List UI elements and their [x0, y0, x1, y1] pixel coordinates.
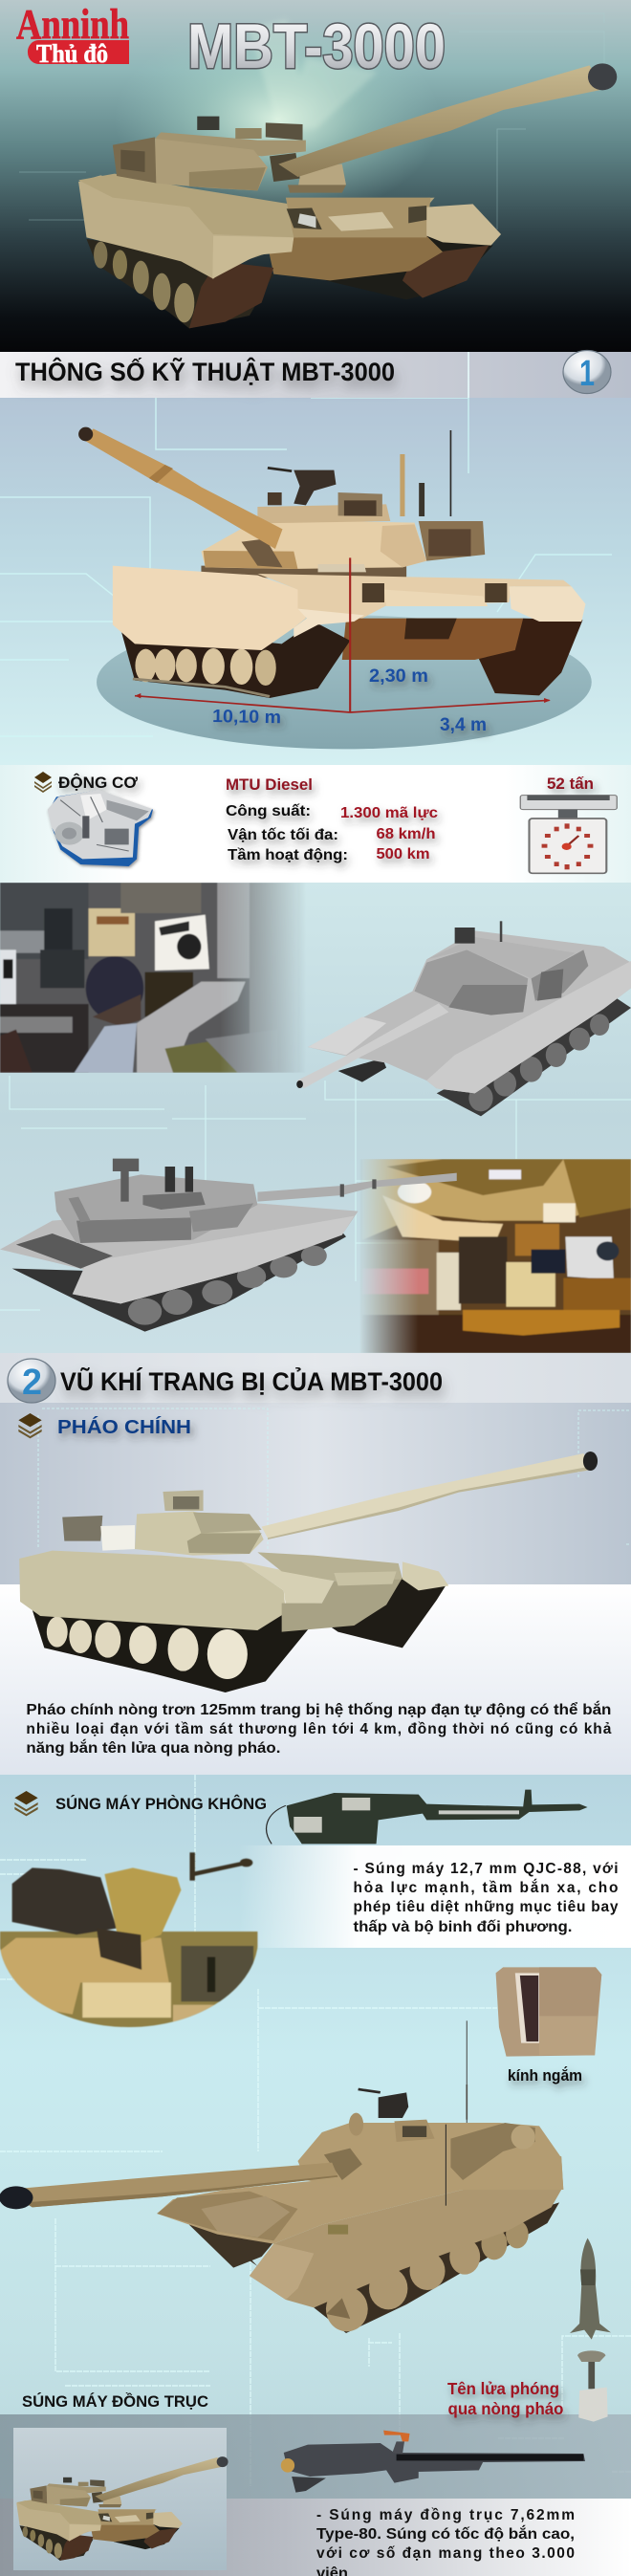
- panel: coaxial gun overlay: [0, 2414, 631, 2576]
- callout: anti-aircraft gun description: [239, 1845, 631, 1948]
- label: dimensions: 2,30 m: [369, 666, 428, 687]
- heading: coaxial machine gun: SÚNG MÁY ĐỒNG TRỤC: [22, 2392, 208, 2411]
- label: weight: 52 tấn: [547, 775, 594, 793]
- tank: main gun photo: [19, 1452, 598, 1692]
- panel: hero: [0, 0, 631, 352]
- text: main gun description: năng bắn tên lửa qua nòng pháo.: [26, 1739, 280, 1757]
- logo: An ninh Thủ đô: [16, 1, 129, 68]
- label: missile: [447, 2379, 564, 2418]
- callout: anti-aircraft gun description: hỏa lực mạnh, tầm bắn xa, cho: [354, 1879, 618, 1896]
- text: engine specs: 68 km/h: [377, 826, 436, 842]
- icon: engine: [48, 790, 153, 866]
- text: engine specs: 1.300 mã lực: [340, 805, 438, 821]
- icon: anti-aircraft gun: [267, 1790, 588, 1844]
- text: coaxial gun description: Type-80. Súng có tốc độ bắn cao,: [316, 2525, 575, 2543]
- callout: anti-aircraft gun description: - Súng máy 12,7 mm QJC-88, với: [354, 1861, 618, 1877]
- tank: sand-coloured main view: [0, 2020, 563, 2333]
- heading: main gun: PHÁO CHÍNH: [57, 1416, 191, 1438]
- text: engine specs: Tầm hoạt động:: [228, 847, 348, 863]
- heading: anti-aircraft machine gun: SÚNG MÁY PHÒNG KHÔNG: [55, 1795, 267, 1813]
- icon: scale: [520, 796, 617, 873]
- text: main gun description: nhiều loại đạn với tầm sát thương lên tới 4 km, đồng thời nó cũng có khả: [26, 1721, 612, 1737]
- callout: anti-aircraft gun description: thấp và bộ binh đối phương.: [354, 1919, 572, 1935]
- icon: sight: [496, 1967, 601, 2057]
- label: missile: Tên lửa phóng: [447, 2379, 559, 2398]
- label: dimensions: [212, 666, 487, 735]
- label: dimensions: 10,10 m: [212, 707, 281, 728]
- text: coaxial gun description: [316, 2507, 575, 2576]
- icon: gun-launched missile: [570, 2238, 611, 2422]
- photo: coaxial gun inset: [13, 2428, 228, 2570]
- header: thông số kỹ thuật: [0, 350, 631, 398]
- tank: grey model side view: [0, 1159, 457, 1332]
- logo: An ninh Thủ đô: Anninh: [16, 1, 129, 48]
- text: main gun description: [26, 1701, 612, 1757]
- photo: tank cabin interior: [360, 1159, 631, 1353]
- text: engine specs: MTU Diesel: [226, 775, 313, 794]
- callout: anti-aircraft gun description: phép tiêu diệt những mục tiêu bay: [354, 1899, 619, 1915]
- tank: hero photo: [78, 63, 617, 328]
- tank: dimensions diagram: [78, 427, 592, 749]
- header: thông số kỹ thuật: 1: [579, 354, 595, 394]
- text: engine specs: Vận tốc tối đa:: [228, 827, 338, 843]
- photo: tank crew interior: [0, 883, 306, 1073]
- header: thông số kỹ thuật: THÔNG SỐ KỸ THUẬT MBT-3000: [15, 356, 395, 386]
- text: engine specs: [226, 775, 438, 863]
- panel: machine gun and missile background: [0, 1775, 631, 2576]
- label: missile: qua nòng pháo: [447, 2399, 564, 2418]
- logo: An ninh Thủ đô: Thủ đô: [36, 39, 108, 68]
- panel: specifications background: [0, 398, 631, 765]
- icon: layers main gun: [18, 1413, 42, 1438]
- header: vũ khí trang bị: 2: [22, 1363, 42, 1403]
- header: vũ khí trang bị: VŨ KHÍ TRANG BỊ CỦA MBT-3000: [60, 1365, 443, 1396]
- text: coaxial gun description: với cơ số đạn mang theo 3.000: [316, 2545, 575, 2562]
- tank: grey model top view: [296, 921, 631, 1116]
- panel: weapons background: [0, 1403, 631, 1775]
- label: dimensions: 3,4 m: [440, 715, 487, 735]
- panel: interior and grey tanks background: [0, 883, 631, 1353]
- text: engine specs: 500 km: [377, 846, 430, 862]
- icon: coaxial machine gun: [281, 2431, 585, 2493]
- text: coaxial gun description: - Súng máy đồng trục 7,62mm: [316, 2507, 575, 2523]
- label: sight: kính ngắm: [508, 2066, 582, 2085]
- header: vũ khí trang bị: [0, 1353, 631, 1403]
- text: main gun description: Pháo chính nòng trơn 125mm trang bị hệ thống nạp đạn tự động có thể bắn: [26, 1701, 611, 1718]
- title: MBT-3000: [187, 11, 446, 81]
- text: engine specs: Công suất:: [226, 803, 311, 819]
- icon: layers engine: [34, 772, 52, 793]
- label: engine: ĐỘNG CƠ: [58, 774, 138, 792]
- panel: engine and weight specs: [0, 765, 631, 883]
- photo: remote weapon station close-up: [0, 1852, 257, 2027]
- icon: layers anti-aircraft: [14, 1791, 38, 1816]
